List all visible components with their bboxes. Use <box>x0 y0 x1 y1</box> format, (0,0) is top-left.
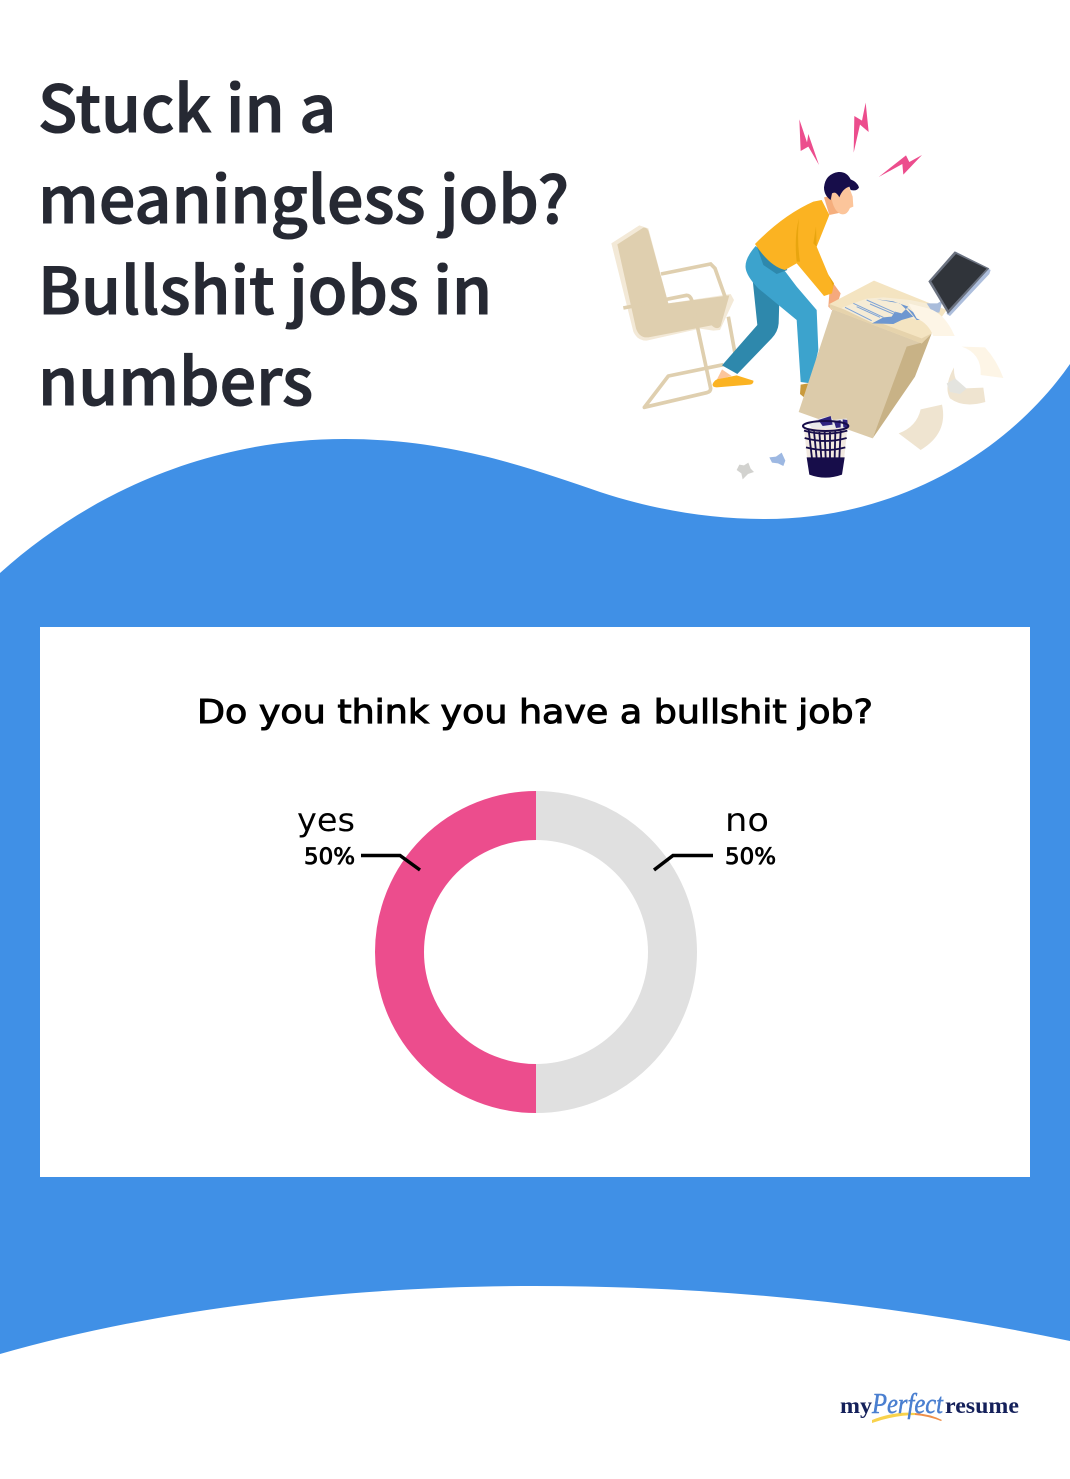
neck <box>824 193 841 215</box>
back leg <box>722 277 780 374</box>
logo: myPerfectResume: resume <box>945 1393 1019 1418</box>
label: no <box>654 801 776 870</box>
title: Bullshit jobs in <box>38 239 492 333</box>
title: meaningless job? <box>38 148 569 242</box>
label: yes: yes <box>297 801 355 839</box>
heading: Do you think you have a bullshit job? <box>197 692 873 731</box>
blue wave background <box>0 364 1070 1354</box>
icon: office chair <box>611 225 735 407</box>
illustration: frustrated man tipping desk <box>611 103 1003 479</box>
panel: survey card <box>40 627 1030 1177</box>
desk top <box>829 281 947 343</box>
falling paper sheets <box>908 303 955 336</box>
icon: waste bin <box>803 416 848 478</box>
monitor <box>947 251 991 316</box>
desk side <box>873 333 932 438</box>
papers <box>841 297 933 323</box>
far shoe <box>800 383 808 397</box>
label: yes: 50% <box>304 845 355 870</box>
front leg <box>746 246 818 383</box>
icon: crumpled papers on floor <box>737 453 785 479</box>
label: yes <box>297 801 420 870</box>
logo: myPerfectResume <box>840 1388 1019 1423</box>
icon: tilted desk with monitor and papers <box>799 251 1003 450</box>
back arm <box>808 249 834 292</box>
logo: myPerfectResume: my <box>840 1393 873 1418</box>
sweater <box>755 200 833 296</box>
title: Stuck in a <box>38 57 336 151</box>
logo: myPerfectResume: Perfect <box>871 1388 944 1420</box>
face <box>831 185 853 214</box>
label: no: 50% <box>725 845 776 870</box>
hair <box>824 172 859 200</box>
near foot and shoe <box>717 369 732 380</box>
donut chart <box>400 816 672 1088</box>
title: numbers <box>38 330 313 424</box>
desk front <box>799 307 922 438</box>
icon: lightning bolts <box>799 103 922 177</box>
label: no: no <box>725 801 769 839</box>
monitor stand <box>924 300 943 313</box>
icon: man <box>713 172 859 397</box>
hand <box>828 283 841 310</box>
